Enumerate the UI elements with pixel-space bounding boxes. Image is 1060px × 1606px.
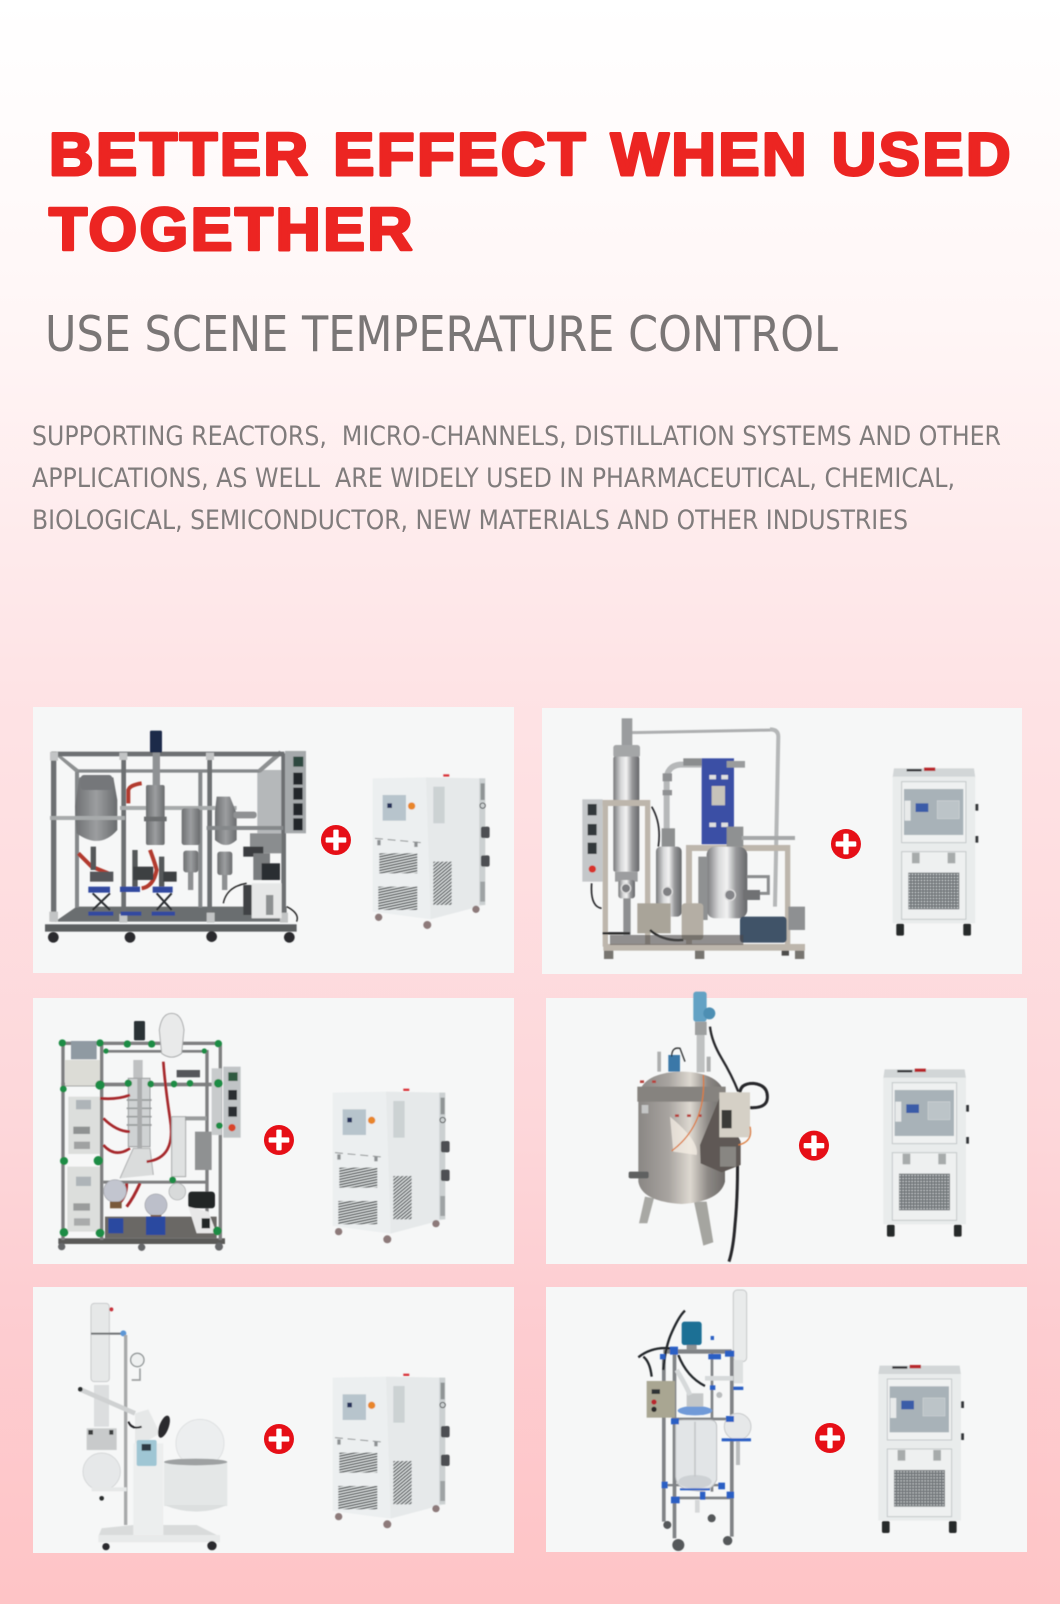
machine: jacketed glass reactor bbox=[638, 1290, 751, 1551]
machine: air-cooled circulator bbox=[333, 1089, 450, 1243]
panel: glass short path rig with chiller bbox=[33, 998, 514, 1264]
machine: chiller cabinet bbox=[883, 1069, 969, 1237]
title: BETTER EFFECT WHEN USED bbox=[49, 121, 1013, 188]
machine: chiller cabinet bbox=[878, 1365, 964, 1533]
machine: stainless distillation rig bbox=[45, 731, 306, 943]
title: TOGETHER bbox=[49, 196, 415, 263]
machine: air-cooled circulator bbox=[333, 1374, 450, 1528]
icon: plus bbox=[264, 1125, 294, 1155]
machine: glass short path distillation bbox=[58, 1013, 241, 1251]
icon: plus bbox=[321, 825, 351, 855]
machine: stainless steel reactor bbox=[629, 992, 767, 1262]
panel: rotary evaporator with chiller bbox=[33, 1287, 514, 1553]
description paragraph: BIOLOGICAL, SEMICONDUCTOR, NEW MATERIALS AND OTHER INDUSTRIES bbox=[32, 505, 908, 536]
title bbox=[49, 121, 1013, 263]
machine: air-cooled circulator bbox=[373, 774, 490, 929]
subtitle: USE SCENE TEMPERATURE CONTROL bbox=[45, 306, 839, 363]
machine: chiller cabinet bbox=[893, 768, 978, 936]
machine: stainless evaporator bbox=[582, 718, 805, 959]
icon: plus bbox=[815, 1423, 845, 1453]
panel: stainless reactor with chiller bbox=[546, 992, 1027, 1264]
panel: short path distillation with chiller bbox=[33, 707, 514, 973]
icon: plus bbox=[831, 829, 861, 859]
description paragraph: APPLICATIONS, AS WELL ARE WIDELY USED IN PHARMACEUTICAL, CHEMICAL, bbox=[32, 463, 955, 494]
icon: plus bbox=[799, 1131, 829, 1161]
panel: stainless evaporator with chiller bbox=[542, 708, 1022, 974]
icon: plus bbox=[264, 1424, 294, 1454]
description paragraph bbox=[32, 421, 1001, 536]
panel: jacketed glass reactor with chiller bbox=[546, 1287, 1027, 1552]
machine: rotary evaporator bbox=[78, 1303, 227, 1550]
